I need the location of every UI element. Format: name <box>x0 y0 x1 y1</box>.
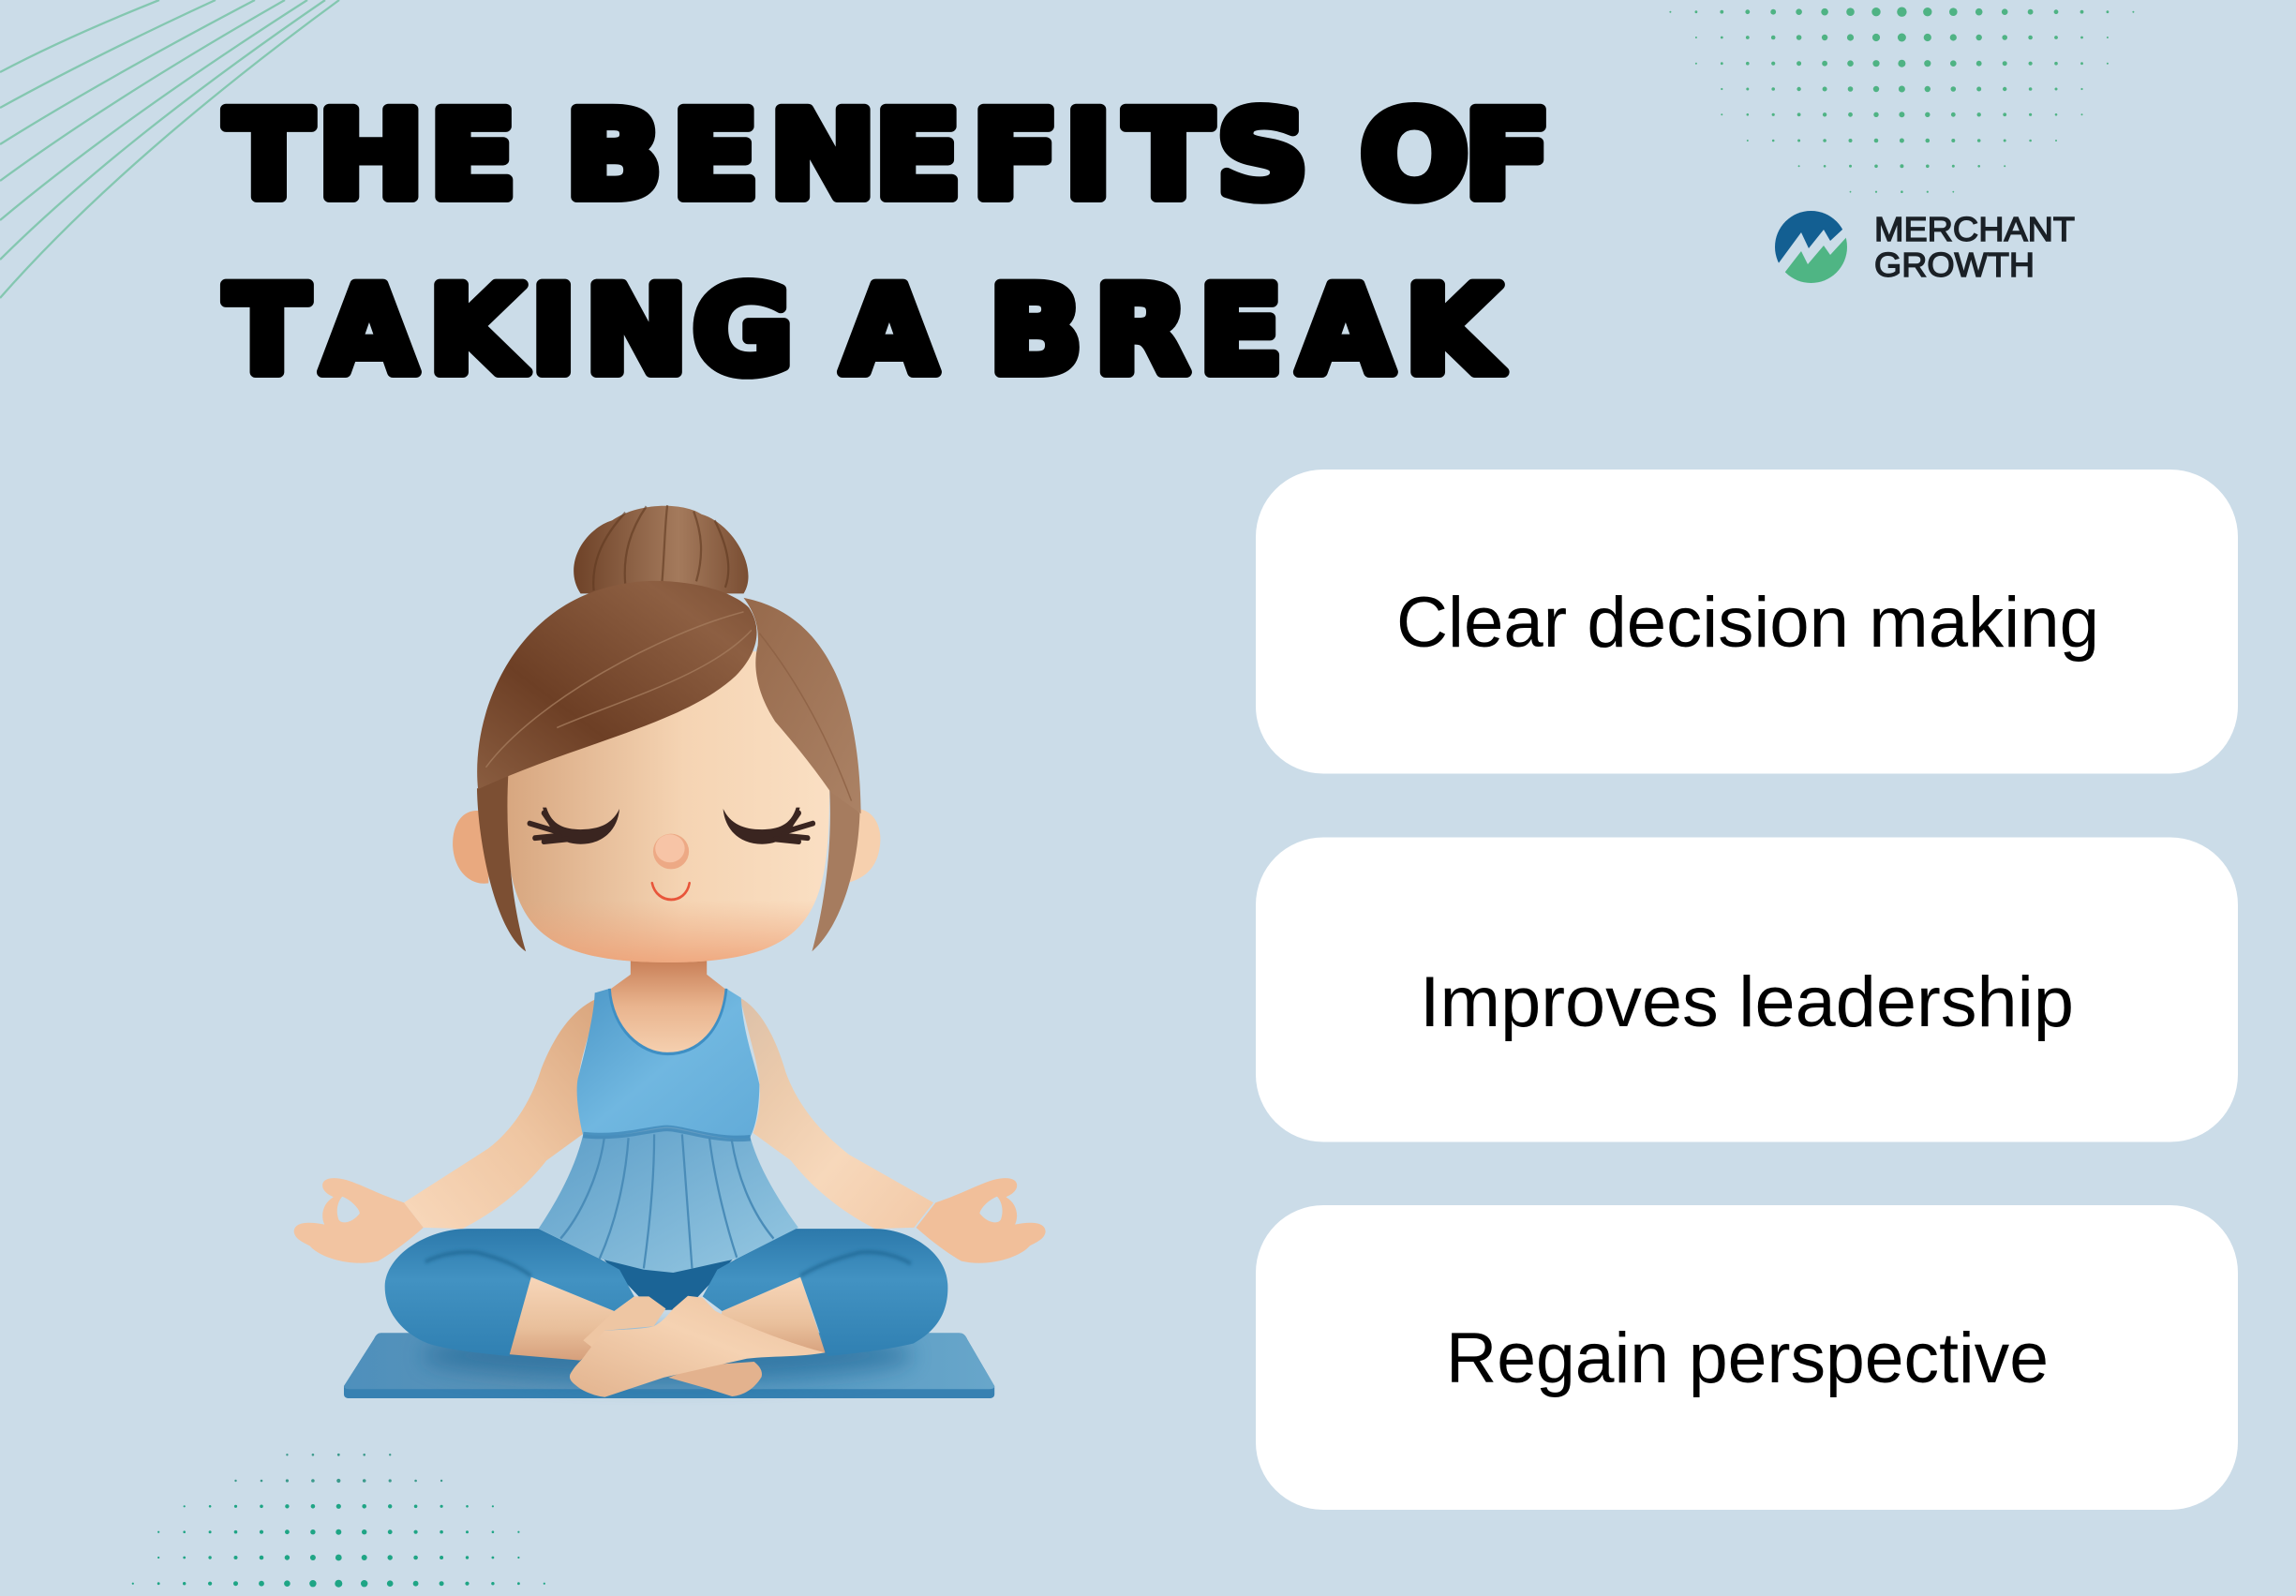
main hair sweep <box>477 581 852 801</box>
crotch shadow <box>600 1255 737 1310</box>
benefit card: improves leadership <box>1256 838 2238 1141</box>
logo wordmark: GROWTH <box>1874 246 2035 284</box>
left thigh crease <box>425 1252 531 1275</box>
decorative curved lines, top left <box>0 0 339 298</box>
character: meditating woman <box>294 505 1046 1398</box>
right calf <box>712 1277 825 1355</box>
under foot <box>668 1362 762 1396</box>
right crossed foot <box>570 1296 825 1397</box>
logo mark <box>1775 211 1847 283</box>
logo: Merchant Growth <box>1775 211 2075 283</box>
title <box>225 87 1551 401</box>
right eye <box>723 808 813 844</box>
tank top <box>577 989 759 1140</box>
hair bun <box>574 505 749 593</box>
yoga mat <box>344 1330 994 1398</box>
left ear <box>453 811 488 884</box>
dot pattern, bottom left <box>132 1454 545 1588</box>
left hand <box>294 1178 424 1263</box>
peplum skirt <box>539 1128 798 1273</box>
right ear <box>846 809 880 883</box>
left trouser leg <box>385 1229 634 1356</box>
neckline trim <box>609 989 726 1053</box>
benefit card: regain perspective: Regain perspective <box>1446 1319 2049 1398</box>
left arm <box>404 998 599 1229</box>
right hair lock <box>812 785 860 951</box>
right arm <box>740 998 933 1229</box>
logo wordmark: MERCHANT <box>1874 210 2075 248</box>
benefit card: regain perspective <box>1256 1205 2238 1510</box>
dot pattern, top right <box>1669 7 2134 193</box>
left hair lock <box>477 770 526 951</box>
face <box>505 651 829 962</box>
mouth <box>652 883 690 900</box>
right trouser leg <box>703 1229 947 1356</box>
neck and chest <box>609 944 726 1057</box>
logo wordmark <box>1874 210 2075 284</box>
left crossed foot <box>583 1296 665 1350</box>
right thigh crease <box>800 1252 911 1275</box>
right hand <box>917 1178 1046 1263</box>
nose <box>653 834 689 869</box>
left eye <box>529 808 619 844</box>
left calf <box>509 1277 614 1361</box>
benefit card: improves leadership: Improves leadership <box>1420 962 2074 1042</box>
legs <box>385 1229 947 1361</box>
benefit card: clear decision making <box>1256 470 2238 774</box>
right hair section <box>743 598 861 813</box>
benefit card: clear decision making: Clear decision making <box>1396 583 2099 663</box>
title: THE BENEFITS OF <box>226 87 1551 226</box>
title: TAKING A BREAK <box>225 261 1504 401</box>
